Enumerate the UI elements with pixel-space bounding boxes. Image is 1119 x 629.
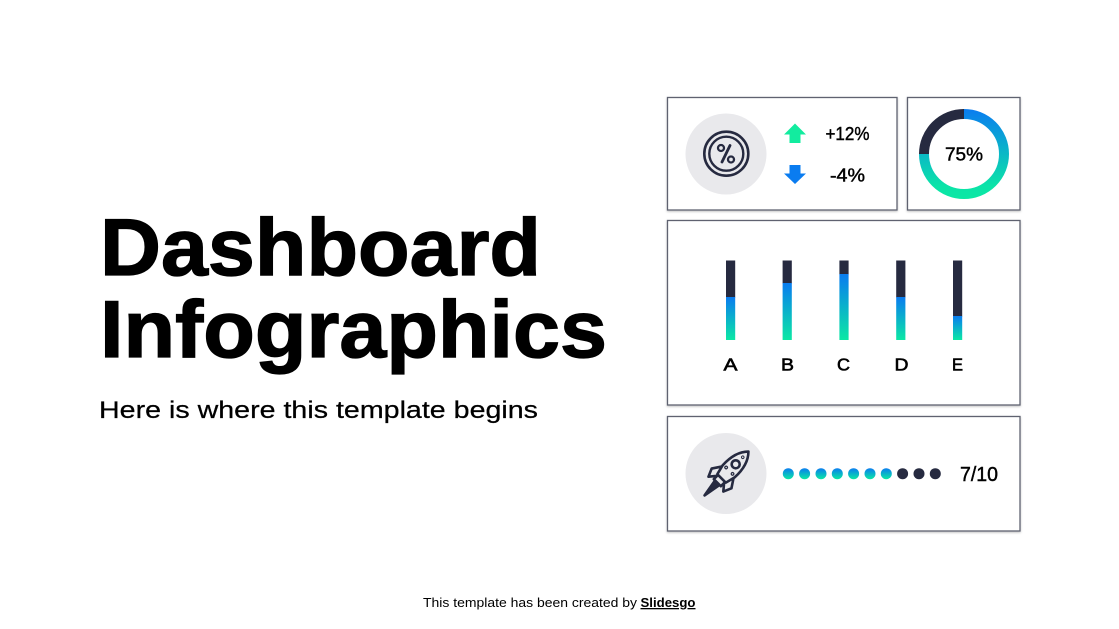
bar labels: E: [952, 354, 963, 374]
icon: down arrow: [784, 165, 806, 184]
title: [100, 203, 607, 375]
bar C: [839, 260, 849, 340]
bar E: [953, 260, 962, 340]
title: Infographics: [100, 285, 607, 375]
donut remainder arc: [924, 114, 964, 154]
progress dots: [783, 468, 941, 479]
icon: rocket: [686, 433, 766, 514]
panel: donut chart: [908, 98, 1020, 210]
bar labels: [724, 354, 963, 374]
footer credit: Slidesgo: [640, 595, 696, 610]
bar A: [726, 260, 735, 340]
donut progress arc: [924, 114, 1004, 194]
value: decrease: -4%: [830, 164, 865, 186]
bar labels: A: [724, 354, 738, 374]
icon: up arrow: [784, 124, 806, 143]
bar B: [783, 260, 792, 340]
subtitle: Here is where this template begins: [99, 397, 538, 424]
panel: rocket score: [668, 416, 1020, 531]
icon: percent badge: [686, 114, 766, 194]
donut value: 75%: [945, 144, 983, 164]
panel: percentage changes: [668, 98, 897, 210]
bar labels: C: [837, 354, 850, 374]
title: Dashboard: [100, 203, 541, 293]
value: increase: +12%: [826, 123, 870, 144]
footer credit: This template has been created by: [423, 595, 638, 610]
bar labels: B: [781, 354, 794, 374]
score value: 7/10: [960, 463, 998, 486]
bar labels: D: [894, 354, 908, 374]
panel: bar chart: [668, 220, 1020, 405]
bar D: [896, 260, 905, 340]
